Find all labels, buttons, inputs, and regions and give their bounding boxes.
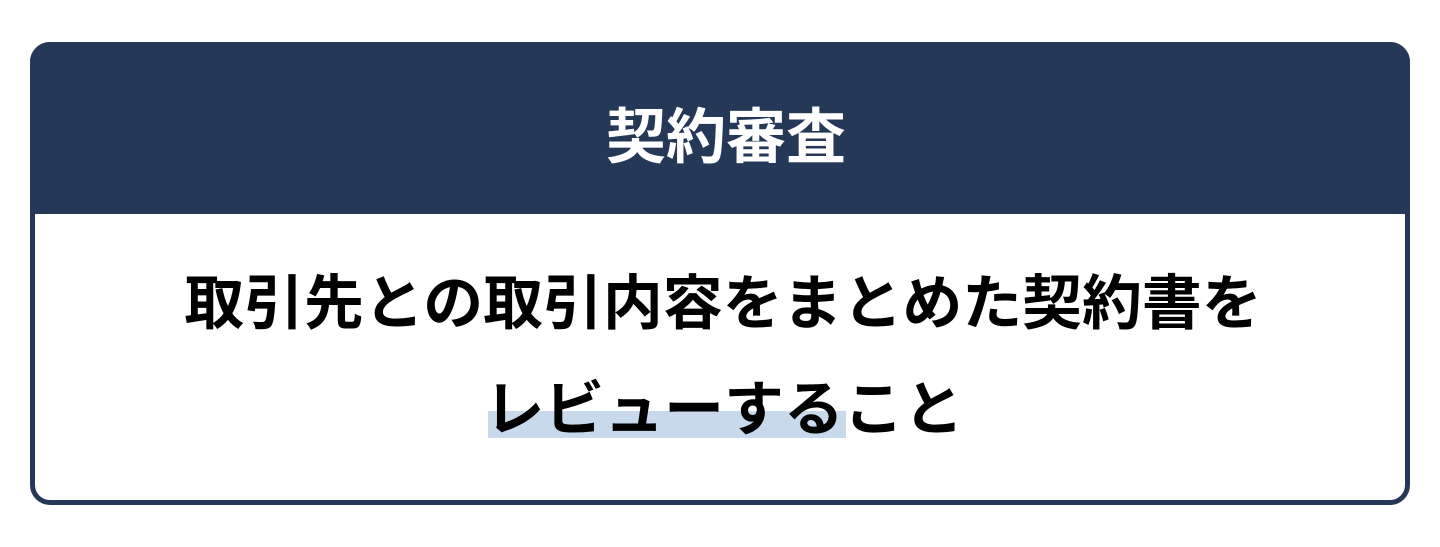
- panel header band: [30, 42, 1410, 214]
- description line 1: 取引先との取引内容をまとめた契約書を: [184, 270, 1262, 337]
- highlight behind text: [488, 411, 846, 438]
- description line 2: レビューすること: [484, 376, 964, 443]
- title: 契約審査: [606, 104, 846, 171]
